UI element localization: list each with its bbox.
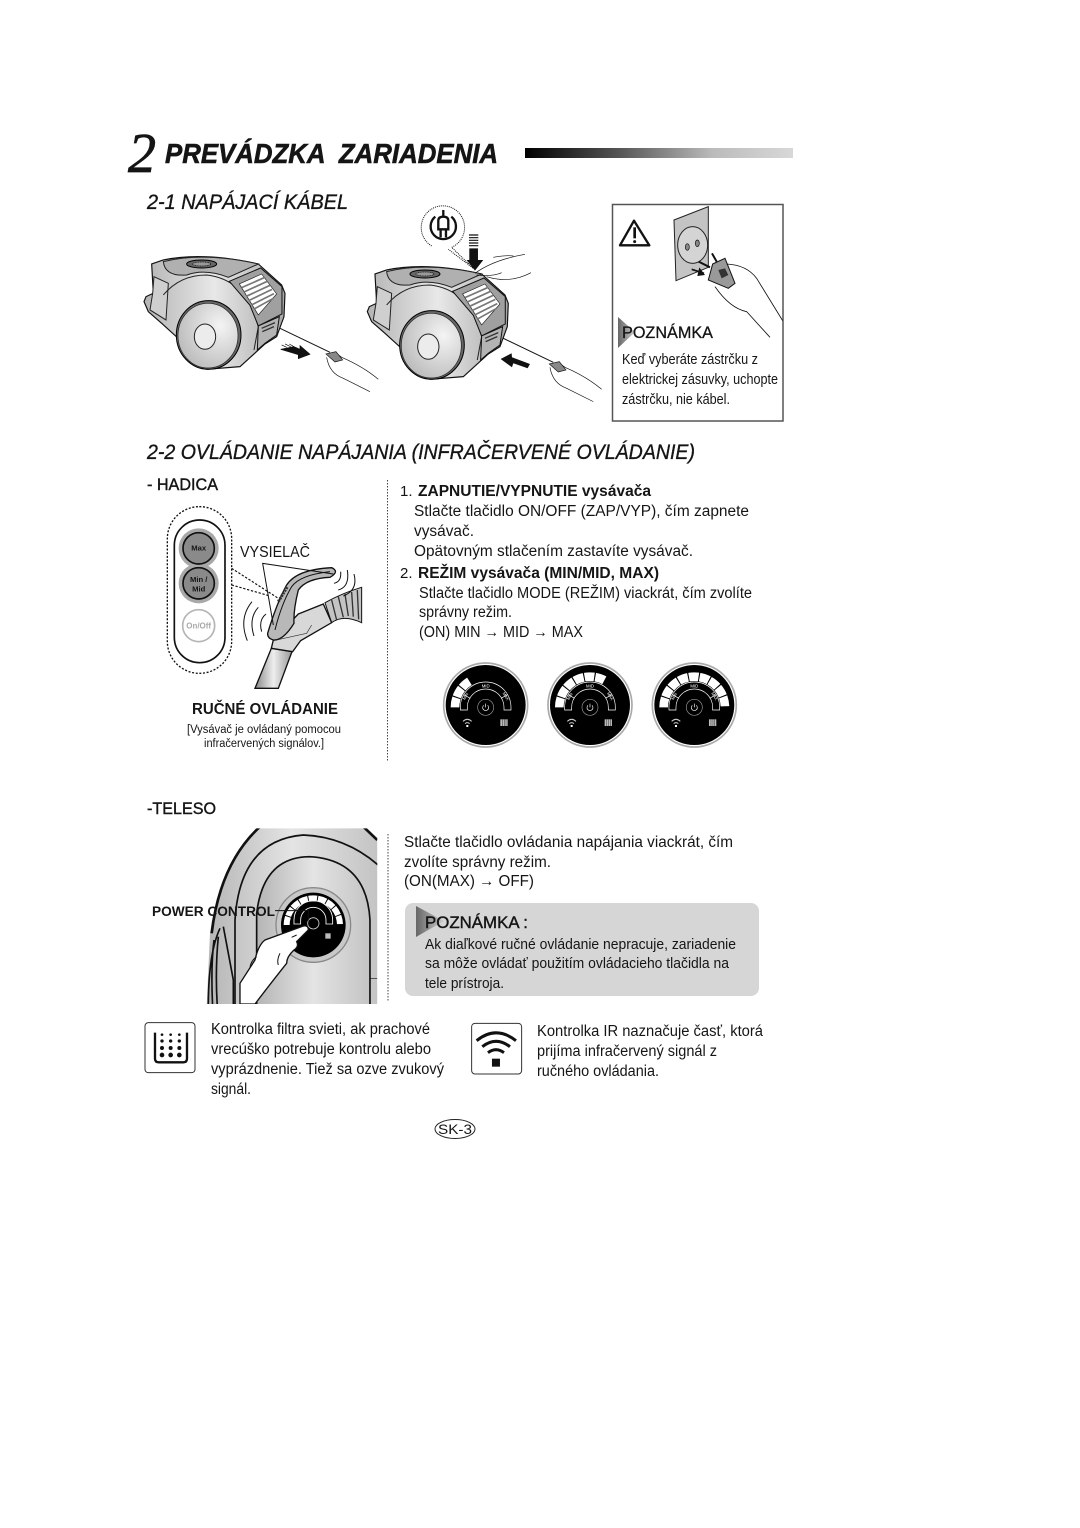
instructions: power and mode: Stlačte tlačidlo ON/OFF (ZAP/VYP), čím zapnete — [414, 503, 749, 520]
dial: min: MAX — [502, 691, 510, 702]
instructions: power and mode — [400, 483, 752, 641]
note text — [425, 936, 736, 992]
transmitter pointer — [263, 563, 333, 625]
note text: Ak diaľkové ručné ovládanie nepracuje, zariadenie — [425, 936, 736, 953]
icon: filter indicator — [145, 1023, 195, 1073]
body instructions — [404, 834, 733, 890]
label: power control: POWER CONTROL — [152, 904, 275, 919]
note text: zástrčku, nie kábel. — [622, 392, 730, 408]
instructions: power and mode: REŽIM vysávača (MIN/MID, MAX) — [418, 564, 659, 582]
remote button panel: On/Off — [186, 621, 211, 630]
heading: 2-1: 2-1 NAPÁJACÍ KÁBEL — [146, 191, 348, 214]
note heading: POZNÁMKA — [622, 323, 714, 342]
remote button panel: Min / — [190, 575, 208, 584]
body instructions: zvolíte správny režim. — [404, 854, 551, 871]
text: filter indicator — [211, 1021, 444, 1098]
panel: grey note — [405, 903, 759, 996]
label: remote control: RUČNÉ OVLÁDANIE — [192, 700, 338, 718]
dial: min: MIN — [461, 692, 469, 701]
arrow: press down — [469, 235, 478, 246]
hand pressing power — [240, 926, 308, 1004]
text: filter indicator: vrecúško potrebuje kontrolu alebo — [211, 1041, 431, 1058]
instructions: power and mode: Opätovným stlačením zastavíte vysávač. — [414, 543, 693, 560]
caption: remote — [187, 724, 341, 750]
dial: max: MID — [690, 684, 698, 689]
icon: IR indicator — [472, 1023, 522, 1074]
hand pressing button — [475, 254, 531, 280]
arrow: pull out — [281, 344, 310, 359]
instructions: power and mode: vysávač. — [414, 523, 474, 540]
note text — [622, 352, 778, 408]
text: IR indicator: ručného ovládania. — [537, 1063, 659, 1080]
illustration: vacuum rewinding cord — [367, 206, 602, 402]
note text: Keď vyberáte zástrčku z — [622, 352, 758, 368]
dial: max: MIN — [670, 692, 678, 701]
signal waves — [244, 570, 355, 641]
heading: 2-2: 2-2 OVLÁDANIE NAPÁJANIA (INFRAČERVENÉ OVLÁDANIE) — [146, 441, 695, 464]
text: IR indicator — [537, 1023, 763, 1080]
icon: cord button callout — [421, 206, 473, 268]
corrugated hose — [325, 587, 362, 623]
note text: tele prístroja. — [425, 975, 504, 992]
note marker triangle — [618, 317, 635, 348]
title number: 2 — [128, 123, 156, 185]
dial: min — [444, 663, 528, 747]
hose handle — [268, 568, 335, 640]
note text: elektrickej zásuvky, uchopte — [622, 372, 778, 388]
dial: mid — [548, 663, 632, 747]
body instructions: (ON(MAX) → OFF) — [404, 873, 534, 890]
instructions: power and mode: 1. — [400, 483, 413, 500]
dial: min: MID — [482, 684, 490, 689]
instructions: power and mode: Stlačte tlačidlo MODE (REŽIM) viackrát, čím zvolíte — [419, 585, 752, 602]
dial: max — [652, 663, 736, 747]
dial: mid: MAX — [606, 691, 615, 702]
subheading: teleso: -TELESO — [147, 799, 216, 818]
remote button panel — [167, 507, 232, 673]
page number: SK-3 — [438, 1121, 472, 1137]
hose connector — [271, 604, 332, 652]
label: transmitter: VYSIELAČ — [240, 544, 310, 561]
note heading: POZNÁMKA : — [425, 913, 528, 932]
illustration: vacuum pulling cord out — [144, 257, 378, 392]
dial: mid: MIN — [566, 692, 574, 701]
illustration: body power control — [207, 825, 380, 1007]
remote button panel: Mid — [192, 584, 206, 593]
panel: warning box — [612, 204, 783, 421]
text: filter indicator: vyprázdnenie. Tiež sa ozve zvukový — [211, 1061, 444, 1078]
title: PREVÁDZKA ZARIADENIA — [165, 138, 498, 169]
icon: warning triangle — [620, 221, 649, 245]
text: filter indicator: Kontrolka filtra svieti, ak prachové — [211, 1021, 430, 1038]
illustration: remote control on hose — [167, 507, 362, 688]
text: IR indicator: Kontrolka IR naznačuje časť, ktorá — [537, 1023, 763, 1040]
caption: remote: infračervených signálov.] — [204, 738, 324, 750]
dial: max: MAX — [710, 691, 719, 702]
note text: sa môže ovládať použitím ovládacieho tlačidla na — [425, 955, 730, 972]
text: filter indicator: signál. — [211, 1081, 251, 1098]
page number — [435, 1120, 475, 1138]
caption: remote: [Vysávač je ovládaný pomocou — [187, 724, 341, 736]
dial: mid: MID — [586, 684, 594, 689]
text: IR indicator: prijíma infračervený signál z — [537, 1043, 717, 1060]
instructions: power and mode: ZAPNUTIE/VYPNUTIE vysávača — [418, 483, 651, 500]
body instructions: Stlačte tlačidlo ovládania napájania viackrát, čím — [404, 834, 733, 851]
instructions: power and mode: 2. — [400, 565, 413, 582]
illustration: unplugging from socket — [674, 207, 783, 337]
instructions: power and mode: (ON) MIN → MID → MAX — [419, 624, 584, 641]
remote button panel: Max — [191, 543, 207, 552]
arrow: cord rewind — [501, 353, 530, 368]
subheading: hadica: - HADICA — [147, 475, 219, 494]
instructions: power and mode: správny režim. — [419, 604, 512, 621]
title gradient bar — [525, 148, 793, 158]
note marker triangle — [416, 906, 444, 937]
hose tube — [255, 648, 292, 688]
